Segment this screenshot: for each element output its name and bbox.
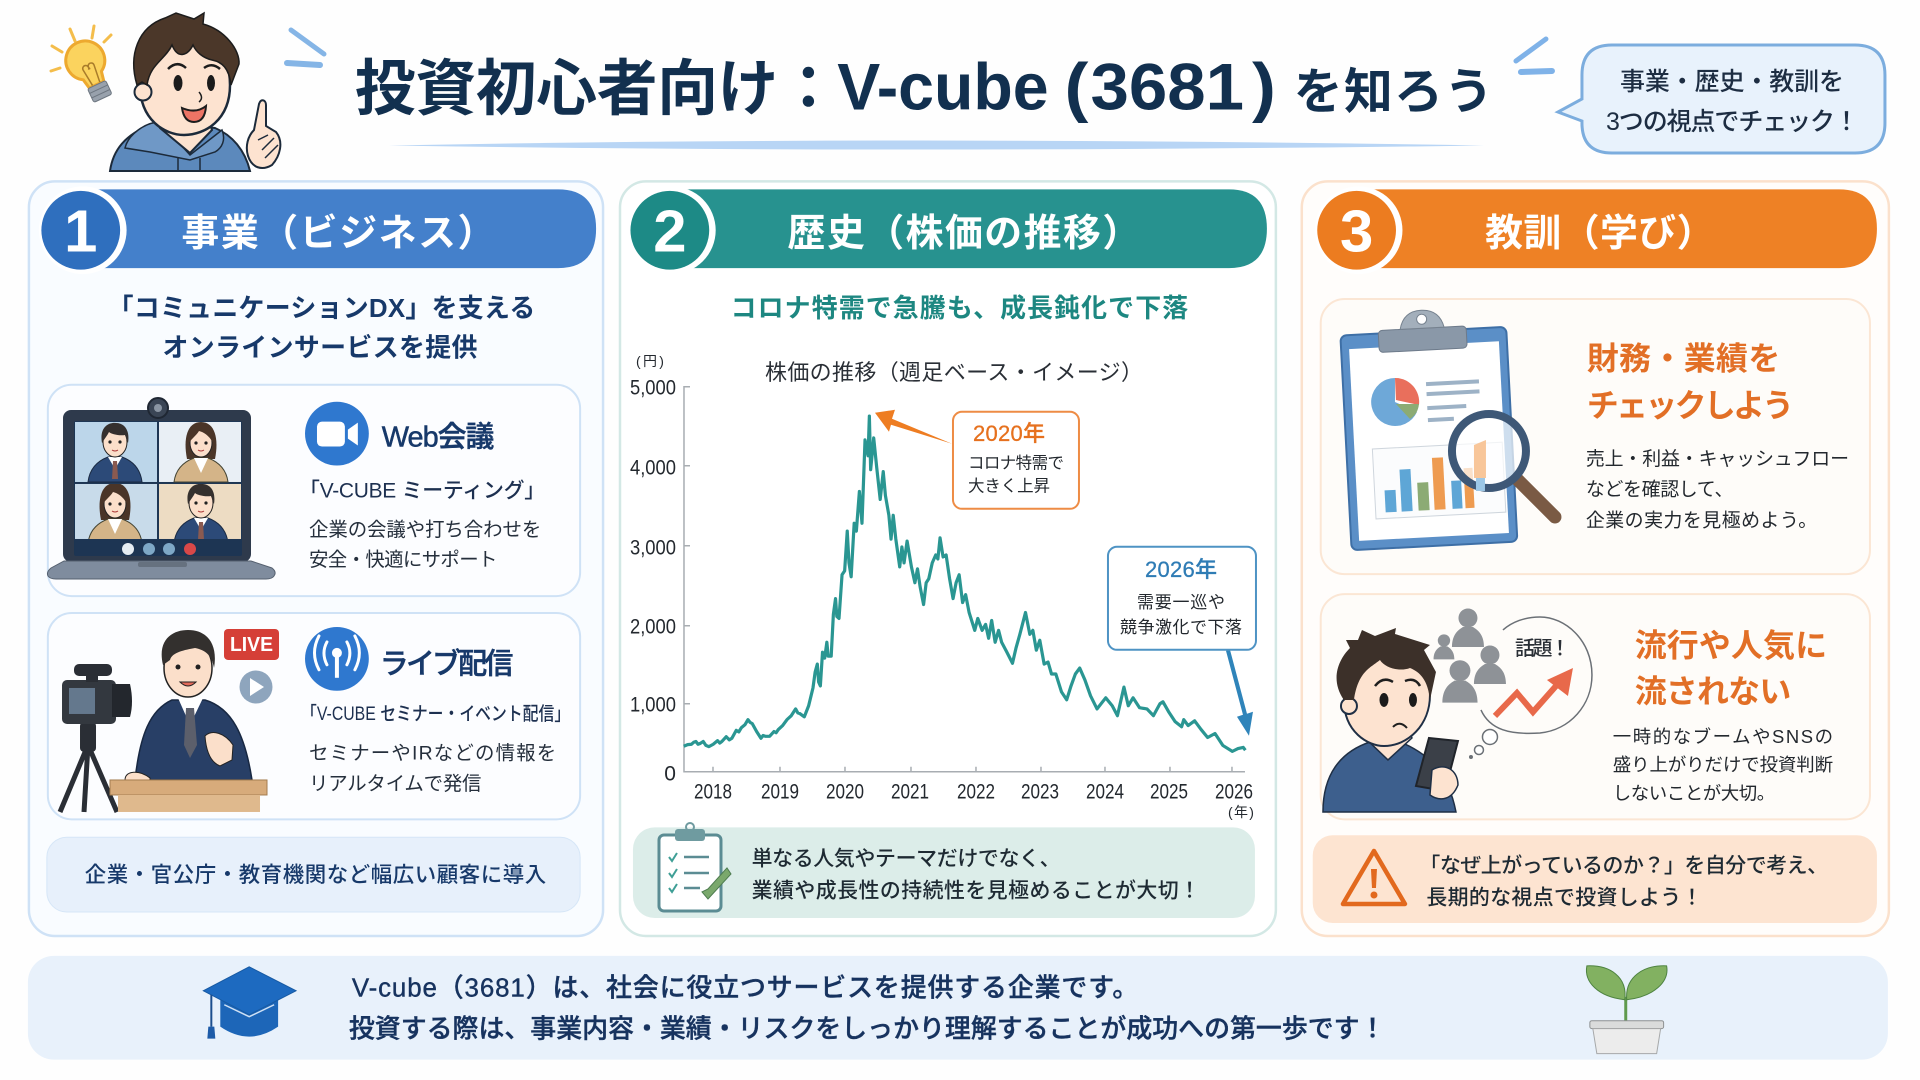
speech bubble: 事業・歴史・教訓を bbox=[1620, 68, 1844, 96]
illustration: trend thought bubble: 話題！ bbox=[1515, 637, 1570, 660]
callout: 2026: 2026年 bbox=[1145, 557, 1217, 582]
icon: video camera bbox=[305, 402, 369, 465]
title bbox=[355, 50, 1493, 124]
customers strip: 企業・官公庁・教育機関など幅広い顧客に導入 bbox=[85, 863, 546, 887]
illustration: laptop video call bbox=[47, 398, 275, 579]
header: business: 事業（ビジネス） bbox=[181, 213, 495, 255]
x axis labels: 2018 bbox=[694, 780, 732, 803]
card text: しないことが大切。 bbox=[1613, 783, 1775, 804]
service description bbox=[309, 742, 556, 795]
y axis labels: 3,000 bbox=[630, 536, 676, 559]
card text: などを確認して、 bbox=[1586, 479, 1733, 501]
header: history: 2 bbox=[653, 198, 686, 265]
card text: 一時的なブームやSNSの bbox=[1613, 726, 1833, 747]
footer text: V-cube（3681）は、社会に役立つサービスを提供する企業です。 bbox=[352, 974, 1138, 1003]
subheading: オンラインサービスを提供 bbox=[162, 334, 478, 363]
illustration: presenter with camera: LIVE bbox=[230, 634, 273, 656]
card: web conference bbox=[47, 385, 580, 596]
card heading: 財務・業績を bbox=[1587, 341, 1780, 377]
card heading: 流されない bbox=[1635, 674, 1791, 710]
panel 3: lessons bbox=[1302, 181, 1889, 936]
price line bbox=[684, 416, 1245, 751]
y axis labels: 1,000 bbox=[630, 693, 676, 716]
y axis labels bbox=[630, 353, 676, 785]
illustration: clipboard with magnifier bbox=[1339, 306, 1555, 550]
customers strip bbox=[47, 837, 580, 912]
header: history bbox=[628, 186, 1267, 274]
icon: checklist clipboard bbox=[659, 823, 731, 911]
title: 3681 bbox=[1090, 50, 1244, 124]
x axis labels bbox=[694, 780, 1254, 820]
illustration: worried boy with phone bbox=[1323, 628, 1458, 812]
footer banner bbox=[28, 956, 1888, 1060]
x axis labels: 2026 bbox=[1215, 780, 1253, 803]
footer text bbox=[349, 974, 1386, 1043]
icon: graduation cap bbox=[203, 967, 296, 1039]
callout: 2020: 2020年 bbox=[973, 421, 1045, 446]
x axis labels: 2023 bbox=[1021, 780, 1059, 803]
title: ： bbox=[778, 55, 838, 122]
icon: plant sprout bbox=[1586, 966, 1667, 1054]
x axis labels: (年) bbox=[1228, 804, 1254, 820]
subheading bbox=[108, 294, 535, 363]
warning strip: 「なぜ上がっているのか？」を自分で考え、 bbox=[1419, 854, 1828, 877]
y axis labels: (円) bbox=[636, 353, 664, 369]
subheading: コロナ特需で急騰も、成長鈍化で下落 bbox=[731, 294, 1188, 323]
card: live streaming bbox=[48, 613, 580, 819]
x axis labels: 2024 bbox=[1086, 780, 1124, 803]
service name: ライブ配信 bbox=[380, 649, 513, 681]
title: V-cube bbox=[837, 50, 1049, 124]
illustration: boy pointing with lightbulb bbox=[51, 13, 280, 171]
title: を知ろう bbox=[1294, 66, 1493, 120]
service name: Web会議 bbox=[382, 421, 495, 453]
callout: 2020 bbox=[875, 410, 1079, 509]
speech bubble: 3つの視点でチェック！ bbox=[1606, 108, 1859, 136]
header: lessons: 教訓（学び） bbox=[1485, 213, 1714, 255]
icon: broadcast antenna bbox=[305, 627, 369, 691]
panel 1: business bbox=[29, 181, 603, 936]
illustration: presenter with camera bbox=[60, 629, 279, 812]
header: lessons: 3 bbox=[1340, 198, 1373, 265]
takeaway strip: 単なる人気やテーマだけでなく、 bbox=[752, 848, 1061, 871]
callout: 2020: コロナ特需で bbox=[968, 454, 1064, 473]
x axis labels: 2019 bbox=[761, 780, 799, 803]
header: lessons bbox=[1315, 186, 1877, 274]
takeaway strip: 業績や成長性の持続性を見極めることが大切！ bbox=[752, 879, 1200, 902]
card: don't follow trends bbox=[1321, 594, 1870, 819]
service description: リアルタイムで発信 bbox=[309, 773, 481, 795]
footer text: 投資する際は、事業内容・業績・リスクをしっかり理解することが成功への第一歩です！ bbox=[349, 1014, 1386, 1043]
warning strip: 長期的な視点で投資しよう！ bbox=[1426, 886, 1702, 909]
callout: 2026: 需要一巡や bbox=[1137, 593, 1225, 612]
card text: 盛り上がりだけで投資判断 bbox=[1613, 754, 1833, 775]
card heading: 流行や人気に bbox=[1635, 628, 1827, 664]
card text bbox=[1613, 726, 1833, 804]
decorative accent marks right bbox=[1516, 39, 1552, 72]
service product: 「V-CUBE セミナー・イベント配信」 bbox=[301, 703, 570, 725]
decorative accent marks left bbox=[287, 30, 324, 65]
service description: セミナーやIRなどの情報を bbox=[309, 742, 556, 764]
y axis labels: 2,000 bbox=[630, 615, 676, 638]
title: ( bbox=[1065, 50, 1089, 124]
callout: 2026 bbox=[1108, 547, 1256, 736]
chart title: 株価の推移（週足ベース・イメージ） bbox=[765, 360, 1143, 385]
header: business: 1 bbox=[64, 198, 97, 265]
y axis labels: 5,000 bbox=[630, 376, 676, 399]
x axis labels: 2021 bbox=[891, 780, 929, 803]
card text: 売上・利益・キャッシュフロー bbox=[1586, 448, 1849, 470]
takeaway strip bbox=[633, 823, 1255, 918]
service description bbox=[309, 519, 541, 571]
header: business bbox=[39, 186, 596, 274]
card text bbox=[1586, 448, 1849, 532]
title: 投資初心者向け bbox=[355, 55, 778, 123]
callout: 2020: 大きく上昇 bbox=[968, 477, 1050, 496]
x axis labels: 2022 bbox=[957, 780, 995, 803]
x axis labels: 2025 bbox=[1150, 780, 1188, 803]
line chart: stock price bbox=[630, 353, 1256, 820]
card heading: チェックしよう bbox=[1587, 387, 1794, 423]
title: ) bbox=[1252, 50, 1276, 124]
illustration: trend thought bubble bbox=[1434, 608, 1592, 759]
subheading: 「コミュニケーションDX」を支える bbox=[108, 294, 535, 323]
card heading bbox=[1635, 628, 1827, 710]
warning strip bbox=[1313, 835, 1877, 923]
card: check financials bbox=[1321, 299, 1870, 574]
card text: 企業の実力を見極めよう。 bbox=[1586, 510, 1817, 532]
service description: 安全・快適にサポート bbox=[309, 549, 497, 571]
title underline bbox=[389, 141, 1484, 150]
icon: warning triangle bbox=[1343, 851, 1405, 904]
panel 2: history bbox=[620, 181, 1276, 936]
service description: 企業の会議や打ち合わせを bbox=[309, 519, 541, 541]
y axis labels: 0 bbox=[664, 762, 676, 785]
x axis labels: 2020 bbox=[826, 780, 864, 803]
callout: 2026: 競争激化で下落 bbox=[1120, 618, 1242, 637]
card heading bbox=[1587, 341, 1794, 423]
header: history: 歴史（株価の推移） bbox=[787, 213, 1140, 255]
speech bubble bbox=[1558, 45, 1885, 153]
y axis labels: 4,000 bbox=[630, 456, 676, 479]
service product: 「V-CUBE ミーティング」 bbox=[299, 480, 545, 503]
